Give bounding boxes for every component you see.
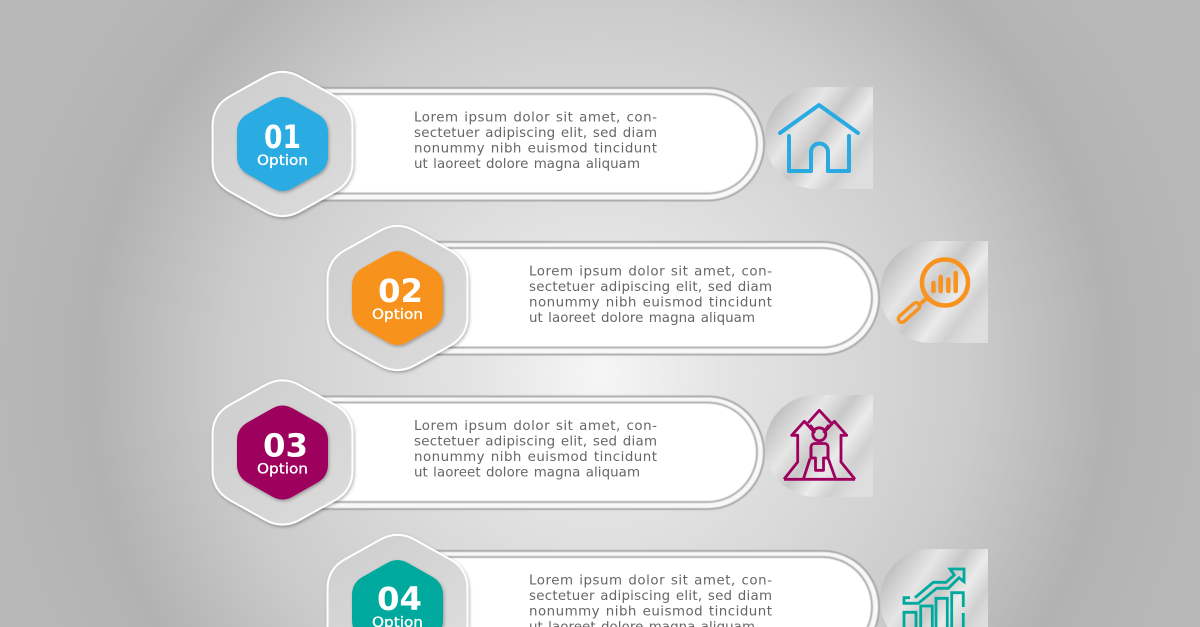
panel: option 01 xyxy=(212,72,873,216)
text: option 01 description: Lorem ipsum dolor sit amet, con- xyxy=(414,110,657,126)
icon: growth chart with arrow xyxy=(904,569,964,627)
panel: option 04 xyxy=(328,535,988,627)
text: option 04 description: sectetuer adipiscing elit, sed diam xyxy=(529,589,772,604)
badge: option 03 hexagon xyxy=(212,380,352,525)
text: option 01 description: sectetuer adipiscing elit, sed diam xyxy=(414,126,657,141)
badge: option 01 hexagon: 01 xyxy=(264,118,301,156)
badge: option 01 hexagon: Option xyxy=(257,153,308,169)
text: option 03 description: sectetuer adipiscing elit, sed diam xyxy=(414,434,657,450)
text: option 03 description: Lorem ipsum dolor sit amet, con- xyxy=(414,419,657,434)
text: option 03 description: nonummy nibh euismod tincidunt xyxy=(414,450,657,465)
badge: option 02 hexagon: Option xyxy=(372,307,423,323)
badge: option 03 hexagon: Option xyxy=(257,462,308,478)
sticker: option 04 icon tile xyxy=(880,549,988,627)
text: option 02 description: Lorem ipsum dolor sit amet, con- xyxy=(529,264,772,280)
sticker: option 03 icon tile xyxy=(765,395,873,497)
card: option 01 text pill xyxy=(300,88,764,200)
badge: option 01 hexagon xyxy=(212,72,352,216)
panel: option 02 xyxy=(328,226,988,370)
badge: option 02 hexagon: 02 xyxy=(378,272,423,310)
text: option 04 description: nonummy nibh euismod tincidunt xyxy=(529,604,772,620)
icon: person with three arrows xyxy=(784,410,855,479)
text: option 02 description: nonummy nibh euismod tincidunt xyxy=(529,296,772,310)
panel: option 03 xyxy=(212,380,873,525)
text: option 03 description: ut laoreet dolore magna aliquam xyxy=(414,466,640,480)
text: option 01 description: ut laoreet dolore magna aliquam xyxy=(414,157,640,172)
text: option 04 description: Lorem ipsum dolor sit amet, con- xyxy=(529,574,772,588)
card: option 02 text pill xyxy=(415,242,879,354)
sticker: option 01 icon tile xyxy=(765,87,873,189)
icon: house xyxy=(780,105,858,171)
card: option 04 text pill xyxy=(415,551,879,627)
badge: option 04 hexagon: 04 xyxy=(377,580,422,618)
sticker: option 02 icon tile xyxy=(880,241,988,343)
icon: magnifier with bars xyxy=(897,260,968,324)
card: option 03 text pill xyxy=(300,396,764,509)
badge: option 04 hexagon xyxy=(328,535,468,627)
text: option 02 description: sectetuer adipiscing elit, sed diam xyxy=(529,280,772,295)
badge: option 03 hexagon: 03 xyxy=(263,426,308,464)
text: option 01 description: nonummy nibh euismod tincidunt xyxy=(414,142,657,156)
text: option 02 description: ut laoreet dolore magna aliquam xyxy=(529,311,755,326)
badge: option 02 hexagon xyxy=(328,226,468,370)
